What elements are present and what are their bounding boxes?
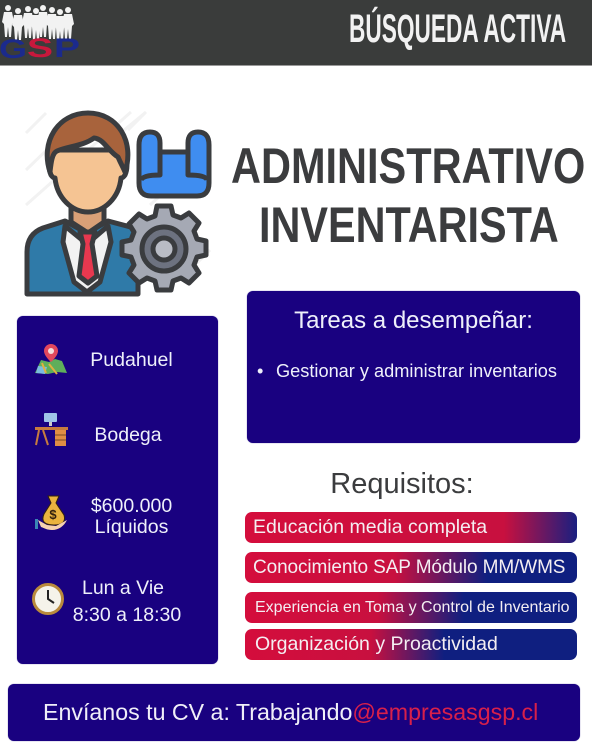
requirement: experience: Experiencia en Toma y Control de Inventario [255,599,570,616]
title line 2: INVENTARISTA [259,197,559,253]
text: salary [91,495,172,538]
panel: tasks [247,291,580,443]
text: schedule [73,577,181,626]
header bar [0,0,592,66]
text: schedule: 8:30 a 18:30 [73,604,181,626]
icon: desk [35,413,68,446]
text: location: Pudahuel [90,349,173,371]
requirement: SAP: Conocimiento SAP Módulo MM/WMS [253,557,565,578]
requirement: organization [245,629,577,660]
requirement: organization: Organización y Proactividad [255,633,498,655]
panel: call to action: Envíanos tu CV a: Trabajando@empresasgsp.cl [43,699,538,725]
tasks list: Gestionar y administrar inventarios [276,361,557,381]
icon: blueprint [139,132,209,196]
header title: BÚSQUEDA ACTIVA [349,7,566,51]
icon: map pin [35,344,67,375]
logo GSP [0,5,80,62]
tasks list: • [257,361,263,381]
title line 1: ADMINISTRATIVO [231,138,585,194]
panel: call to action [8,684,580,741]
illustration: businessman with blueprint and gear [24,110,212,296]
icon: clock [32,583,64,615]
text: workplace: Bodega [94,424,162,446]
requirement: education: Educación media completa [253,516,487,538]
panel: details [17,316,218,664]
main title [231,138,585,253]
text: salary: Líquidos [95,516,168,538]
requirement: SAP [245,552,577,583]
text: schedule: Lun a Vie [82,577,164,599]
requirements heading: Requisitos: [330,468,474,500]
tasks heading: Tareas a desempeñar: [294,307,533,334]
requirement: education [245,512,577,543]
text: salary: $600.000 [91,495,172,517]
icon: money bag: $ [49,507,57,522]
icon: person [27,113,138,294]
requirement: experience [245,592,577,623]
icon: gear [122,206,206,290]
icon: money bag [35,496,67,530]
